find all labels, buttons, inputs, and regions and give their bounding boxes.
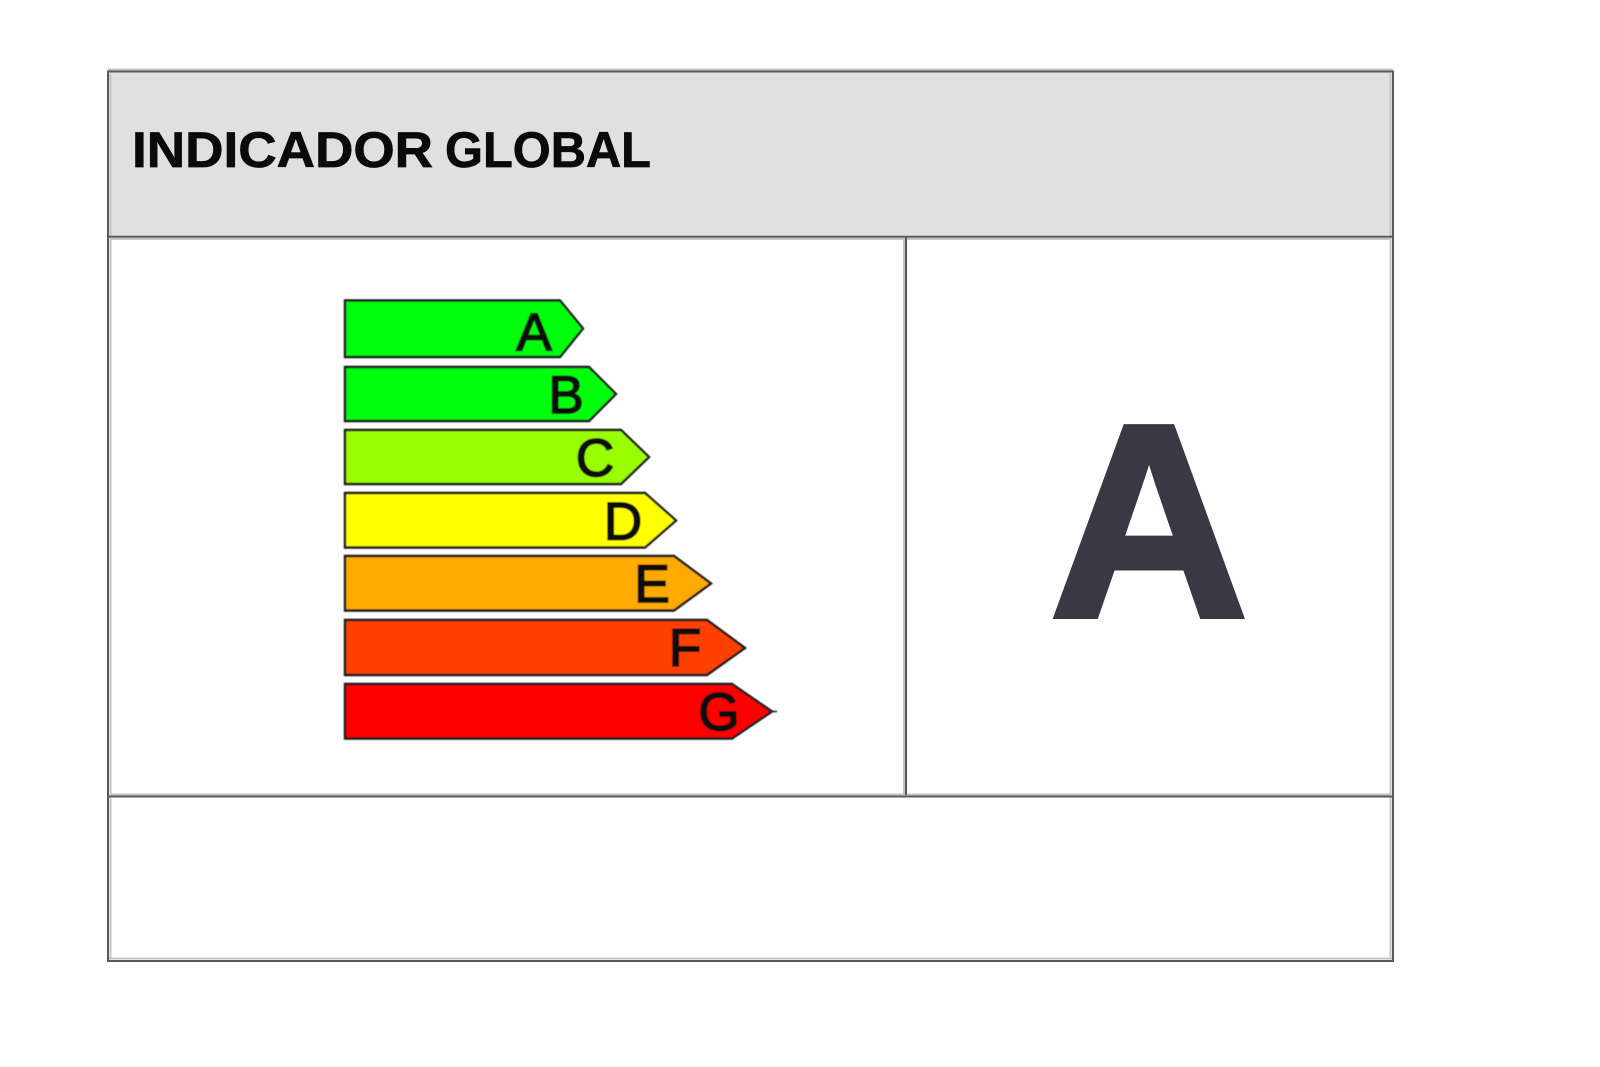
arrow: rating D (345, 492, 676, 552)
arrow: rating G: G (698, 683, 740, 742)
panel: global indicator table (108, 70, 1393, 961)
big rating letter: A (1049, 368, 1249, 676)
arrow: rating C (345, 429, 649, 488)
arrow: rating E: E (634, 555, 670, 614)
heading (132, 122, 651, 178)
arrow: rating C: C (576, 429, 614, 488)
arrow: rating D: D (604, 492, 642, 552)
arrow: rating B (345, 366, 616, 425)
arrow: rating A (345, 300, 583, 362)
arrow: rating E (345, 555, 711, 614)
heading: INDICADOR (132, 122, 433, 178)
arrow: rating F: F (669, 619, 701, 678)
panel: header band (108, 72, 1393, 237)
heading: GLOBAL (445, 122, 651, 178)
arrow: rating F (345, 619, 745, 678)
arrow: rating B: B (548, 366, 584, 425)
chart: energy rating arrows (345, 300, 777, 742)
arrow: rating A: A (516, 303, 552, 362)
arrow: rating G (345, 683, 777, 742)
